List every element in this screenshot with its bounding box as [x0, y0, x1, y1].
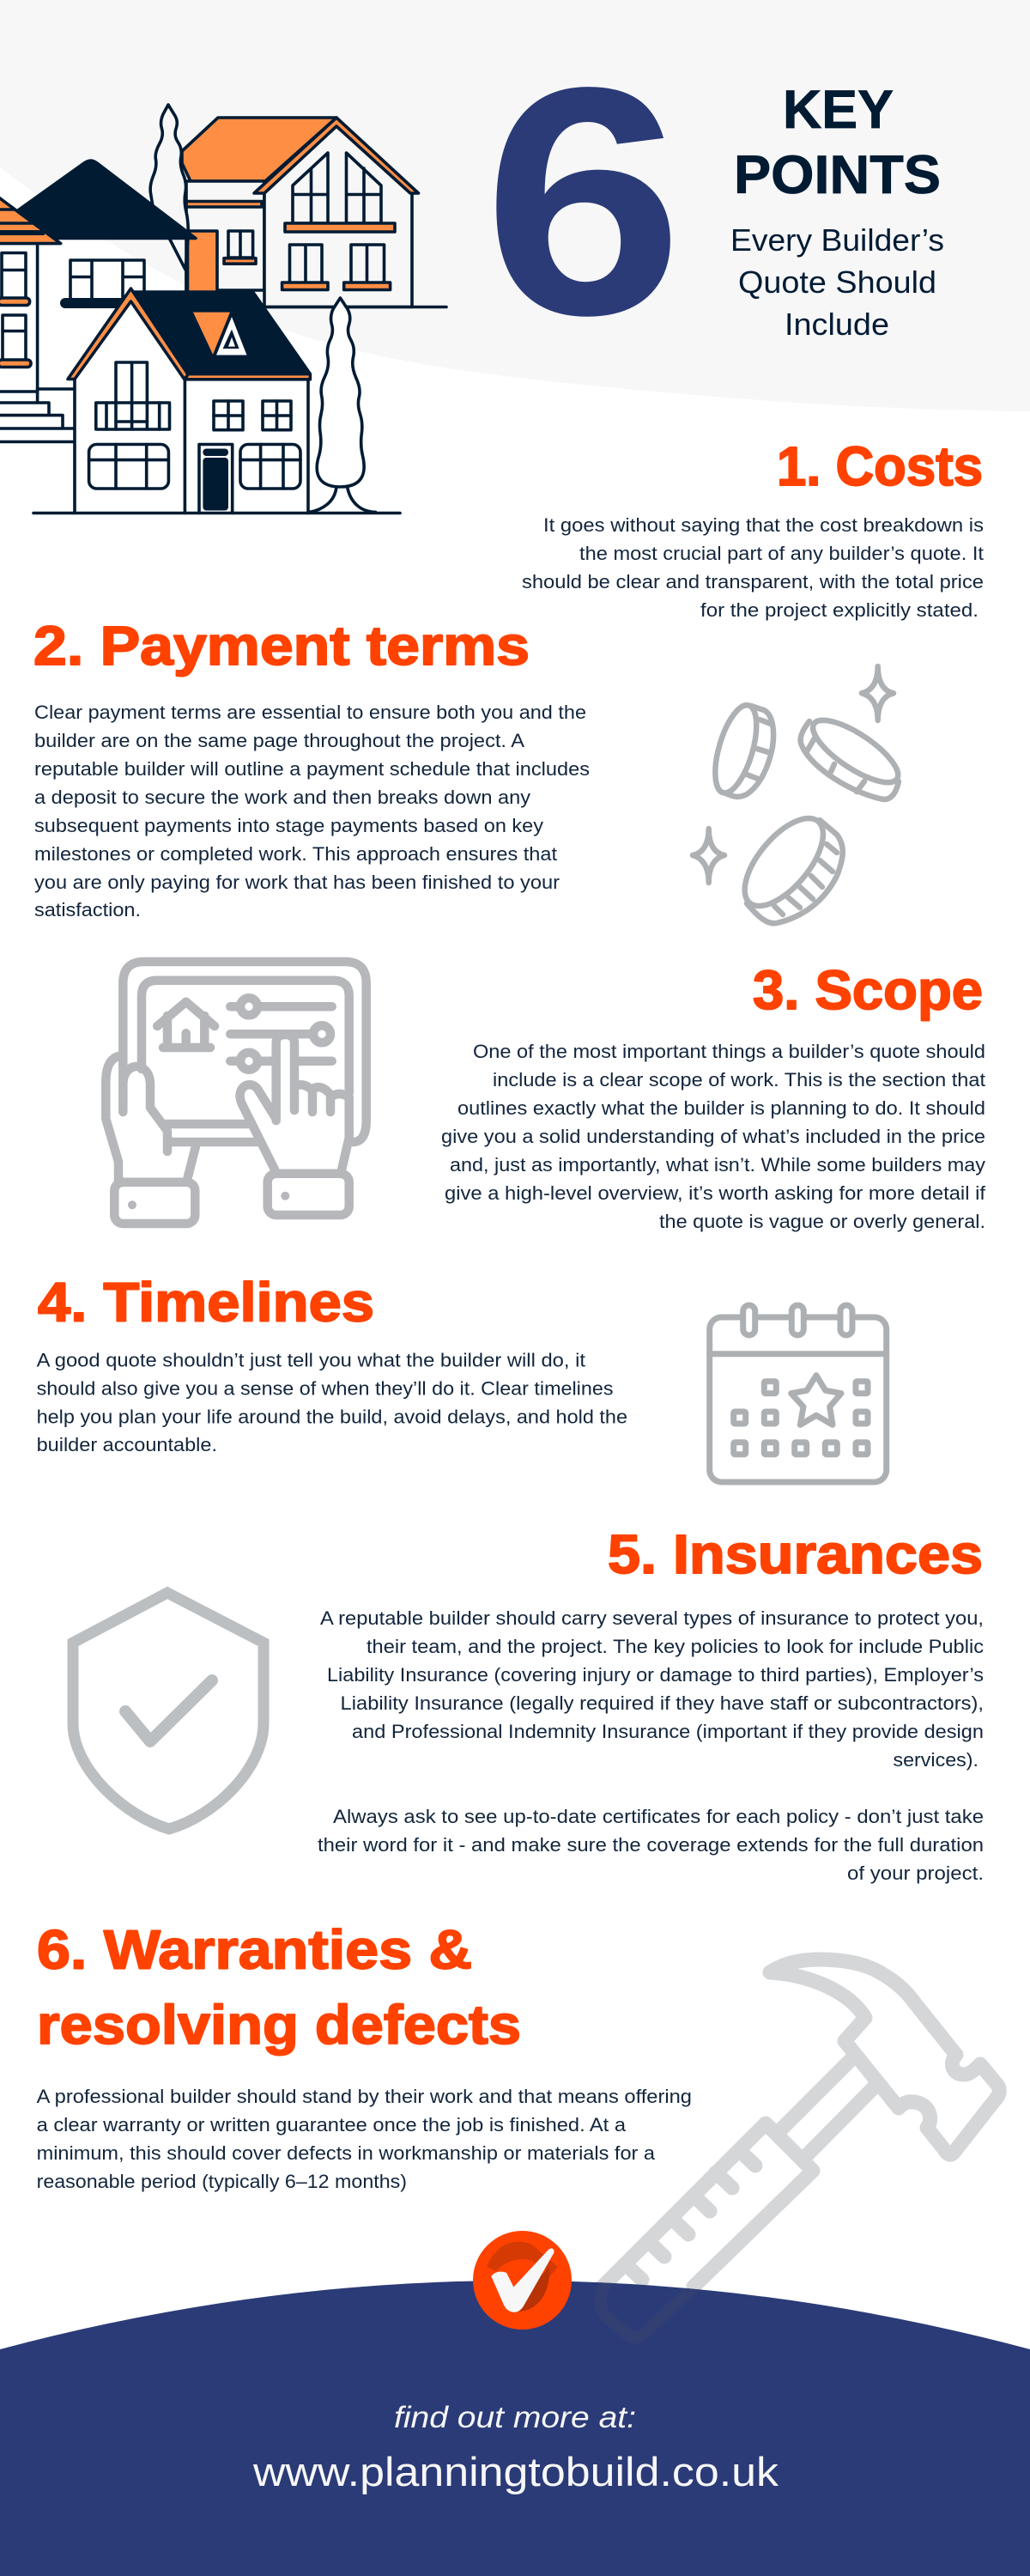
body: timelines: A good quote shouldn’t just tell you what the builder will do, it: [37, 1350, 585, 1371]
hammer handle and ruler grip: [601, 2061, 875, 2288]
body: scope: give a high-level overview, it’s worth asking for more detail if: [445, 1182, 986, 1204]
back tree: [150, 105, 188, 270]
body: warranties: minimum, this should cover defects in workmanship or materials for a: [37, 2142, 656, 2164]
body: scope: give you a solid understanding of what’s included in the price: [441, 1126, 985, 1147]
sparkle: top right: [862, 666, 894, 720]
body: insurances: services).: [893, 1749, 978, 1771]
body: insurances: their word for it - and make sure the coverage extends for the full duration: [318, 1834, 984, 1856]
section 5: insurances: [318, 1523, 984, 1884]
body: insurances: Always ask to see up-to-date certificates for each policy - don’t just take: [333, 1806, 984, 1827]
body: payment terms: reputable builder will outline a payment schedule that includes: [34, 758, 590, 780]
section 2: payment terms: [33, 615, 590, 920]
body: payment terms: a deposit to secure the work and then breaks down any: [34, 787, 530, 808]
section 6: warranties: [37, 1919, 692, 2192]
footer text: [252, 2401, 779, 2494]
body: timelines: help you plan your life around the build, avoid delays, and hold the: [37, 1406, 627, 1428]
icon: hammer: [601, 1959, 999, 2288]
body: timelines: builder accountable.: [37, 1434, 217, 1455]
body: insurances: and Professional Indemnity Insurance (important if they provide design: [352, 1721, 984, 1742]
body: payment terms: builder are on the same page throughout the project. A: [34, 730, 524, 751]
front house: [68, 289, 310, 513]
subtitle: Every Builder’s: [730, 222, 944, 258]
front tree: [310, 298, 376, 512]
body: warranties: A professional builder should stand by their work and that means offering: [37, 2086, 692, 2107]
section 3: scope: [441, 959, 986, 1232]
body: timelines: should also give you a sense of when they’ll do it. Clear timelines: [37, 1378, 614, 1400]
far left house: [0, 196, 61, 368]
body: scope: One of the most important things a builder’s quote should: [473, 1041, 985, 1062]
header background curve: [0, 0, 1030, 411]
heading: insurances: 5. Insurances: [608, 1523, 983, 1585]
body: payment terms: [34, 702, 590, 920]
coin: top left: [707, 701, 773, 798]
left hand: [106, 1056, 196, 1224]
body: costs: the most crucial part of any builder’s quote. It: [579, 543, 984, 564]
heading: warranties and defects: resolving defects: [37, 1994, 521, 2056]
big number 6: 6: [483, 21, 683, 383]
body: insurances: Liability Insurance (legally required if they have staff or subcontractors),: [340, 1692, 984, 1714]
sliders: [230, 998, 332, 1070]
body: warranties: reasonable period (typically 6–12 months): [37, 2171, 407, 2192]
dormer window: [193, 313, 247, 355]
middle house: [18, 161, 196, 401]
section 4: timelines: [37, 1271, 627, 1455]
icon: coins and sparkles: [693, 666, 906, 923]
heading: warranties and defects: 6. Warranties &: [37, 1919, 472, 1981]
body: scope: and, just as importantly, what isn’t. While some builders may: [450, 1154, 985, 1176]
body: payment terms: satisfaction.: [34, 899, 141, 920]
coin: bottom: [730, 805, 843, 923]
body: warranties: [37, 2086, 692, 2192]
body: insurances: A reputable builder should carry several types of insurance to protect you,: [320, 1607, 984, 1629]
body: costs: for the project explicitly stated.: [700, 599, 978, 621]
body: payment terms: Clear payment terms are essential to ensure both you and the: [34, 702, 586, 723]
heading: warranties and defects: [37, 1919, 521, 2056]
body: timelines: [37, 1350, 627, 1455]
coin: top right: [801, 709, 906, 799]
website address: www.planningtobuild.co.uk: [252, 2449, 779, 2494]
illustration: row of houses: [0, 105, 446, 513]
body: insurances: Liability Insurance (covering injury or damage to third parties), Employer’s: [327, 1664, 984, 1686]
body: costs: It goes without saying that the cost breakdown is: [543, 514, 984, 536]
body: costs: should be clear and transparent, with the total price: [522, 571, 984, 592]
body: insurances: of your project.: [847, 1862, 984, 1884]
body: insurances: [318, 1607, 984, 1884]
body: insurances: their team, and the project. The key policies to look for include Public: [367, 1636, 984, 1657]
title: KEY: [783, 80, 894, 140]
heading: costs: 1. Costs: [777, 435, 983, 497]
body: costs: [522, 514, 984, 621]
footer background: [0, 2281, 1030, 2576]
subtitle: Include: [785, 307, 889, 342]
star: [791, 1376, 841, 1425]
body: scope: [441, 1041, 986, 1232]
body: scope: the quote is vague or overly general.: [659, 1211, 985, 1232]
subtitle: Quote Should: [738, 264, 936, 300]
footer text: find out more at:: [394, 2401, 636, 2434]
sparkle: bottom left: [693, 829, 724, 883]
heading: timelines: 4. Timelines: [38, 1271, 374, 1333]
section 1: costs: [522, 435, 984, 621]
title: [730, 80, 944, 342]
heading: scope: 3. Scope: [753, 959, 983, 1021]
body: payment terms: you are only paying for work that has been finished to your: [34, 872, 560, 893]
icon: calendar with star: [710, 1305, 887, 1482]
hammer end over footer: [599, 2282, 700, 2289]
heading: payment terms: 2. Payment terms: [33, 615, 530, 677]
right hand: [240, 1035, 349, 1215]
back right house: [182, 118, 446, 307]
body: payment terms: milestones or completed work. This approach ensures that: [34, 843, 557, 865]
body: warranties: a clear warranty or written guarantee once the job is finished. At a: [37, 2114, 627, 2136]
icon: shield with check: [73, 1593, 264, 1829]
body: payment terms: subsequent payments into stage payments based on key: [34, 815, 543, 836]
tablet frame: [123, 962, 367, 1142]
ground line: [33, 512, 400, 514]
binder rings: [743, 1305, 852, 1335]
front steps: [0, 389, 74, 441]
body: scope: outlines exactly what the builder is planning to do. It should: [457, 1097, 985, 1119]
title: POINTS: [734, 145, 941, 205]
logo: orange tick badge: [473, 2231, 572, 2330]
icon: hands on tablet: [106, 962, 367, 1224]
house on screen: [157, 1002, 215, 1048]
subtitle: [730, 222, 944, 342]
hammer head: [770, 1959, 999, 2154]
date squares: [734, 1382, 868, 1455]
body: scope: include is a clear scope of work. This is the section that: [493, 1069, 985, 1091]
